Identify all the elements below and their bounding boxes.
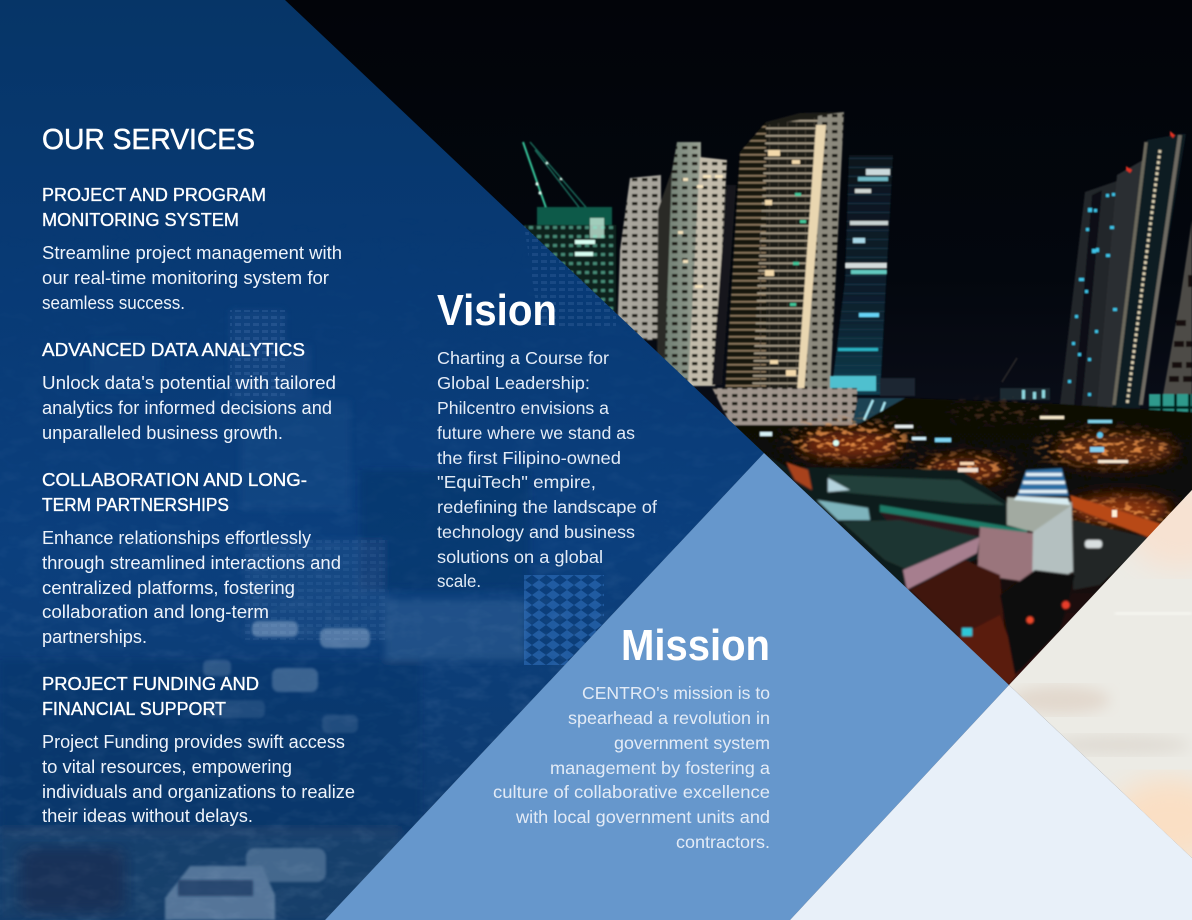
- text block: vision statement: "EquiTech" empire,: [437, 472, 596, 492]
- rooftop complex: [764, 453, 1165, 685]
- ghosted street photo in navy panel: [0, 226, 616, 920]
- photo: night city skyline: [521, 111, 1192, 685]
- text block: vision statement: technology and business: [437, 522, 635, 542]
- text block: vision statement: scale.: [437, 571, 481, 591]
- tower D glass: [830, 155, 893, 395]
- service: project and program monitoring system: PROJECT AND PROGRAM: [42, 185, 266, 205]
- text block: vision statement: solutions on a global: [437, 547, 603, 567]
- service: collaboration and long-term partnerships: centralized platforms, fostering: [42, 578, 295, 598]
- heading: our services: OUR SERVICES: [42, 124, 255, 156]
- podium: [712, 388, 906, 433]
- service: project funding and financial support: PROJECT FUNDING AND: [42, 674, 259, 694]
- text block: vision statement: the first Filipino-owned: [437, 448, 621, 468]
- service: project funding and financial support: to vital resources, empowering: [42, 757, 292, 777]
- tower C: [725, 112, 844, 392]
- far skyline: [880, 358, 1050, 400]
- service: project funding and financial support: FINANCIAL SUPPORT: [42, 699, 226, 719]
- text block: mission statement: [493, 683, 770, 852]
- text block: mission statement: with local government units and: [515, 807, 770, 827]
- service: project funding and financial support: Project Funding provides swift access: [42, 732, 345, 752]
- service: project and program monitoring system: seamless success.: [42, 293, 185, 313]
- right towers: [1060, 131, 1192, 467]
- service: collaboration and long-term partnerships: Enhance relationships effortlessly: [42, 528, 311, 548]
- text block: vision statement: redefining the landscape of: [437, 497, 657, 517]
- text block: vision statement: Charting a Course for: [437, 348, 609, 368]
- text block: mission statement: spearhead a revolution in: [568, 708, 770, 728]
- service: advanced data analytics: unparalleled business growth.: [42, 423, 283, 443]
- service: collaboration and long-term partnerships: collaboration and long-term: [42, 602, 269, 622]
- heading: vision: Vision: [437, 286, 557, 335]
- panel: services navy triangle: [0, 0, 764, 920]
- text block: vision statement: Global Leadership:: [437, 373, 590, 393]
- text block: mission statement: CENTRO's mission is to: [582, 683, 770, 703]
- service: advanced data analytics: Unlock data's potential with tailored: [42, 373, 336, 393]
- dark tower behind: [712, 185, 736, 385]
- service: collaboration and long-term partnerships: COLLABORATION AND LONG-: [42, 470, 307, 490]
- text block: vision statement: future where we stand as: [437, 423, 635, 443]
- ground with street lights: [730, 395, 1192, 700]
- service: project and program monitoring system: our real-time monitoring system for: [42, 268, 329, 288]
- street light specks: [760, 416, 1128, 517]
- text block: vision statement: [437, 348, 657, 591]
- panel: mission triangle: [325, 453, 1009, 920]
- service: collaboration and long-term partnerships: [42, 470, 341, 647]
- panel: translucent right triangle over photo: [1009, 480, 1192, 862]
- service: advanced data analytics: ADVANCED DATA ANALYTICS: [42, 340, 305, 360]
- service: collaboration and long-term partnerships: TERM PARTNERSHIPS: [42, 495, 229, 515]
- service: advanced data analytics: [42, 340, 336, 443]
- panel: pale lower-right triangle: [790, 685, 1192, 920]
- tower B: [657, 142, 727, 386]
- service: project funding and financial support: individuals and organizations to realize: [42, 782, 355, 802]
- service: project and program monitoring system: [42, 185, 342, 313]
- tower A: [617, 175, 661, 340]
- service: project and program monitoring system: Streamline project management with: [42, 243, 342, 263]
- text block: vision statement: Philcentro envisions a: [437, 398, 609, 418]
- service: advanced data analytics: analytics for informed decisions and: [42, 398, 332, 418]
- service: project and program monitoring system: MONITORING SYSTEM: [42, 210, 239, 230]
- service: collaboration and long-term partnerships: through streamlined interactions and: [42, 553, 341, 573]
- text block: mission statement: government system: [614, 733, 770, 753]
- text block: mission statement: contractors.: [676, 832, 770, 852]
- heading: mission: Mission: [621, 621, 770, 670]
- service: collaboration and long-term partnerships: partnerships.: [42, 627, 147, 647]
- service: project funding and financial support: their ideas without delays.: [42, 806, 253, 826]
- text block: mission statement: management by fostering a: [550, 758, 770, 778]
- crane and building under construction: [523, 142, 616, 330]
- text block: mission statement: culture of collaborative excellence: [493, 782, 770, 802]
- service: project funding and financial support: [42, 674, 355, 826]
- ghost cars: [165, 621, 370, 920]
